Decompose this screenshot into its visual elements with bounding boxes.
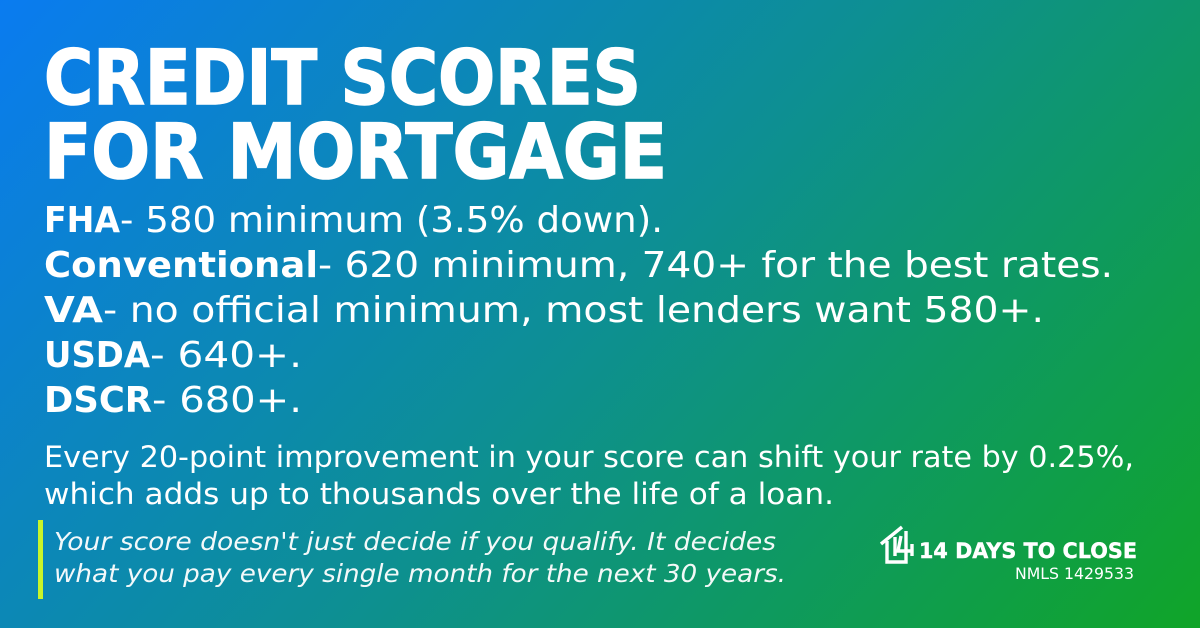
Conventional line: - 620 minimum, 740+ for the best rates. xyxy=(318,245,1113,286)
Conventional line xyxy=(44,245,1113,286)
rate improvement paragraph: which adds up to thousands over the life of a loan. xyxy=(44,477,834,511)
FHA line: FHA xyxy=(44,200,120,241)
rate improvement paragraph: Every 20-point improvement in your score can shift your rate by 0.25%, xyxy=(44,440,1134,474)
title: FOR MORTGAGE xyxy=(44,107,667,196)
USDA line: USDA xyxy=(44,335,150,376)
VA line: - no official minimum, most lenders want 580+. xyxy=(103,290,1044,331)
USDA line xyxy=(44,335,302,376)
italic callout quote: what you pay every single month for the next 30 years. xyxy=(54,559,786,588)
USDA line: - 640+. xyxy=(150,335,302,376)
Conventional line: Conventional xyxy=(44,245,318,286)
DSCR line xyxy=(44,380,302,421)
italic callout quote xyxy=(54,527,786,588)
credit score minimums list xyxy=(44,200,1113,421)
logo: 14 Days to Close xyxy=(881,527,1137,583)
DSCR line: DSCR xyxy=(44,380,152,421)
DSCR line: - 680+. xyxy=(152,380,302,421)
title xyxy=(44,33,667,196)
NMLS number: NMLS 1429533 xyxy=(1015,564,1134,583)
icon: house with 14 xyxy=(881,527,913,562)
callout accent bar xyxy=(38,520,43,599)
rate improvement paragraph xyxy=(44,440,1134,511)
italic callout quote: Your score doesn't just decide if you qualify. It decides xyxy=(54,527,776,556)
title: CREDIT SCORES xyxy=(44,33,641,122)
FHA line: - 580 minimum (3.5% down). xyxy=(120,200,663,241)
VA line: VA xyxy=(44,290,103,331)
logo wordmark: 14 DAYS TO CLOSE xyxy=(919,539,1137,564)
